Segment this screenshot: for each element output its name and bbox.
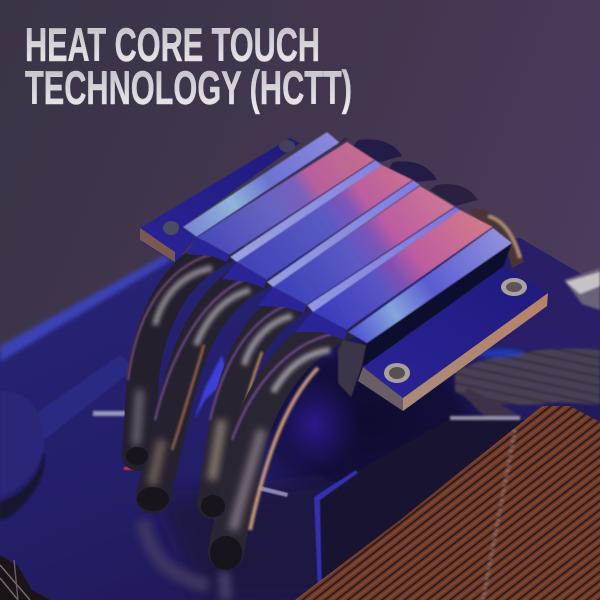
copper fin stack [295,406,600,600]
strip 5 [348,228,512,343]
screw hole left [163,221,179,235]
title [25,18,352,114]
screw hole front [384,363,410,383]
plate seam highlight [93,411,127,416]
title line 2: TECHNOLOGY (HCTT) [25,61,352,114]
screw hole back [279,140,295,152]
purple glow [270,375,360,475]
lower dark reflection [160,480,340,600]
top-right purple panel [500,238,600,355]
plate lit edge [0,255,172,362]
red glint [124,467,135,470]
flange copper edge [403,293,548,411]
pipe bases [126,447,225,517]
contact bar 2 [237,165,413,280]
dark tower body [314,416,540,600]
back loops of heat pipes [352,139,524,268]
strip 2 [230,160,382,262]
cable bundle [455,348,600,418]
blue sliver between pipes [194,355,228,420]
title line 1: HEAT CORE TOUCH [25,18,320,71]
strip 3 [267,180,420,287]
circular pad at left [0,355,135,520]
fin vertical seam [483,430,515,600]
grey reflection below last pipe [224,572,226,600]
pipe necks at block [186,237,347,340]
screw hole rear [501,278,527,296]
white connector at right [564,268,600,310]
base plate [0,238,600,600]
bar separators [197,138,493,330]
flange front face [358,367,403,411]
left mounting flange [140,138,300,262]
dark channel [345,243,512,367]
contact bar 1 [197,142,375,255]
strip A [183,132,340,237]
pipe 2 [152,270,265,497]
grey reflection of pipes on plate [143,520,208,586]
heat pipes [128,246,345,554]
contact bar 3 [273,186,455,305]
strip 4 [307,207,460,312]
contact bar 4 [313,210,493,330]
plate seam highlight right [258,486,288,497]
dark mid band beneath heat pipes [235,325,505,515]
lower left fin corner [0,555,50,600]
block end face [338,340,366,397]
pipe 3 [210,295,305,503]
pipe 1 [128,246,228,455]
right mounting flange [358,267,548,411]
pipe 4 [226,322,345,554]
heat core touch block [183,132,512,397]
